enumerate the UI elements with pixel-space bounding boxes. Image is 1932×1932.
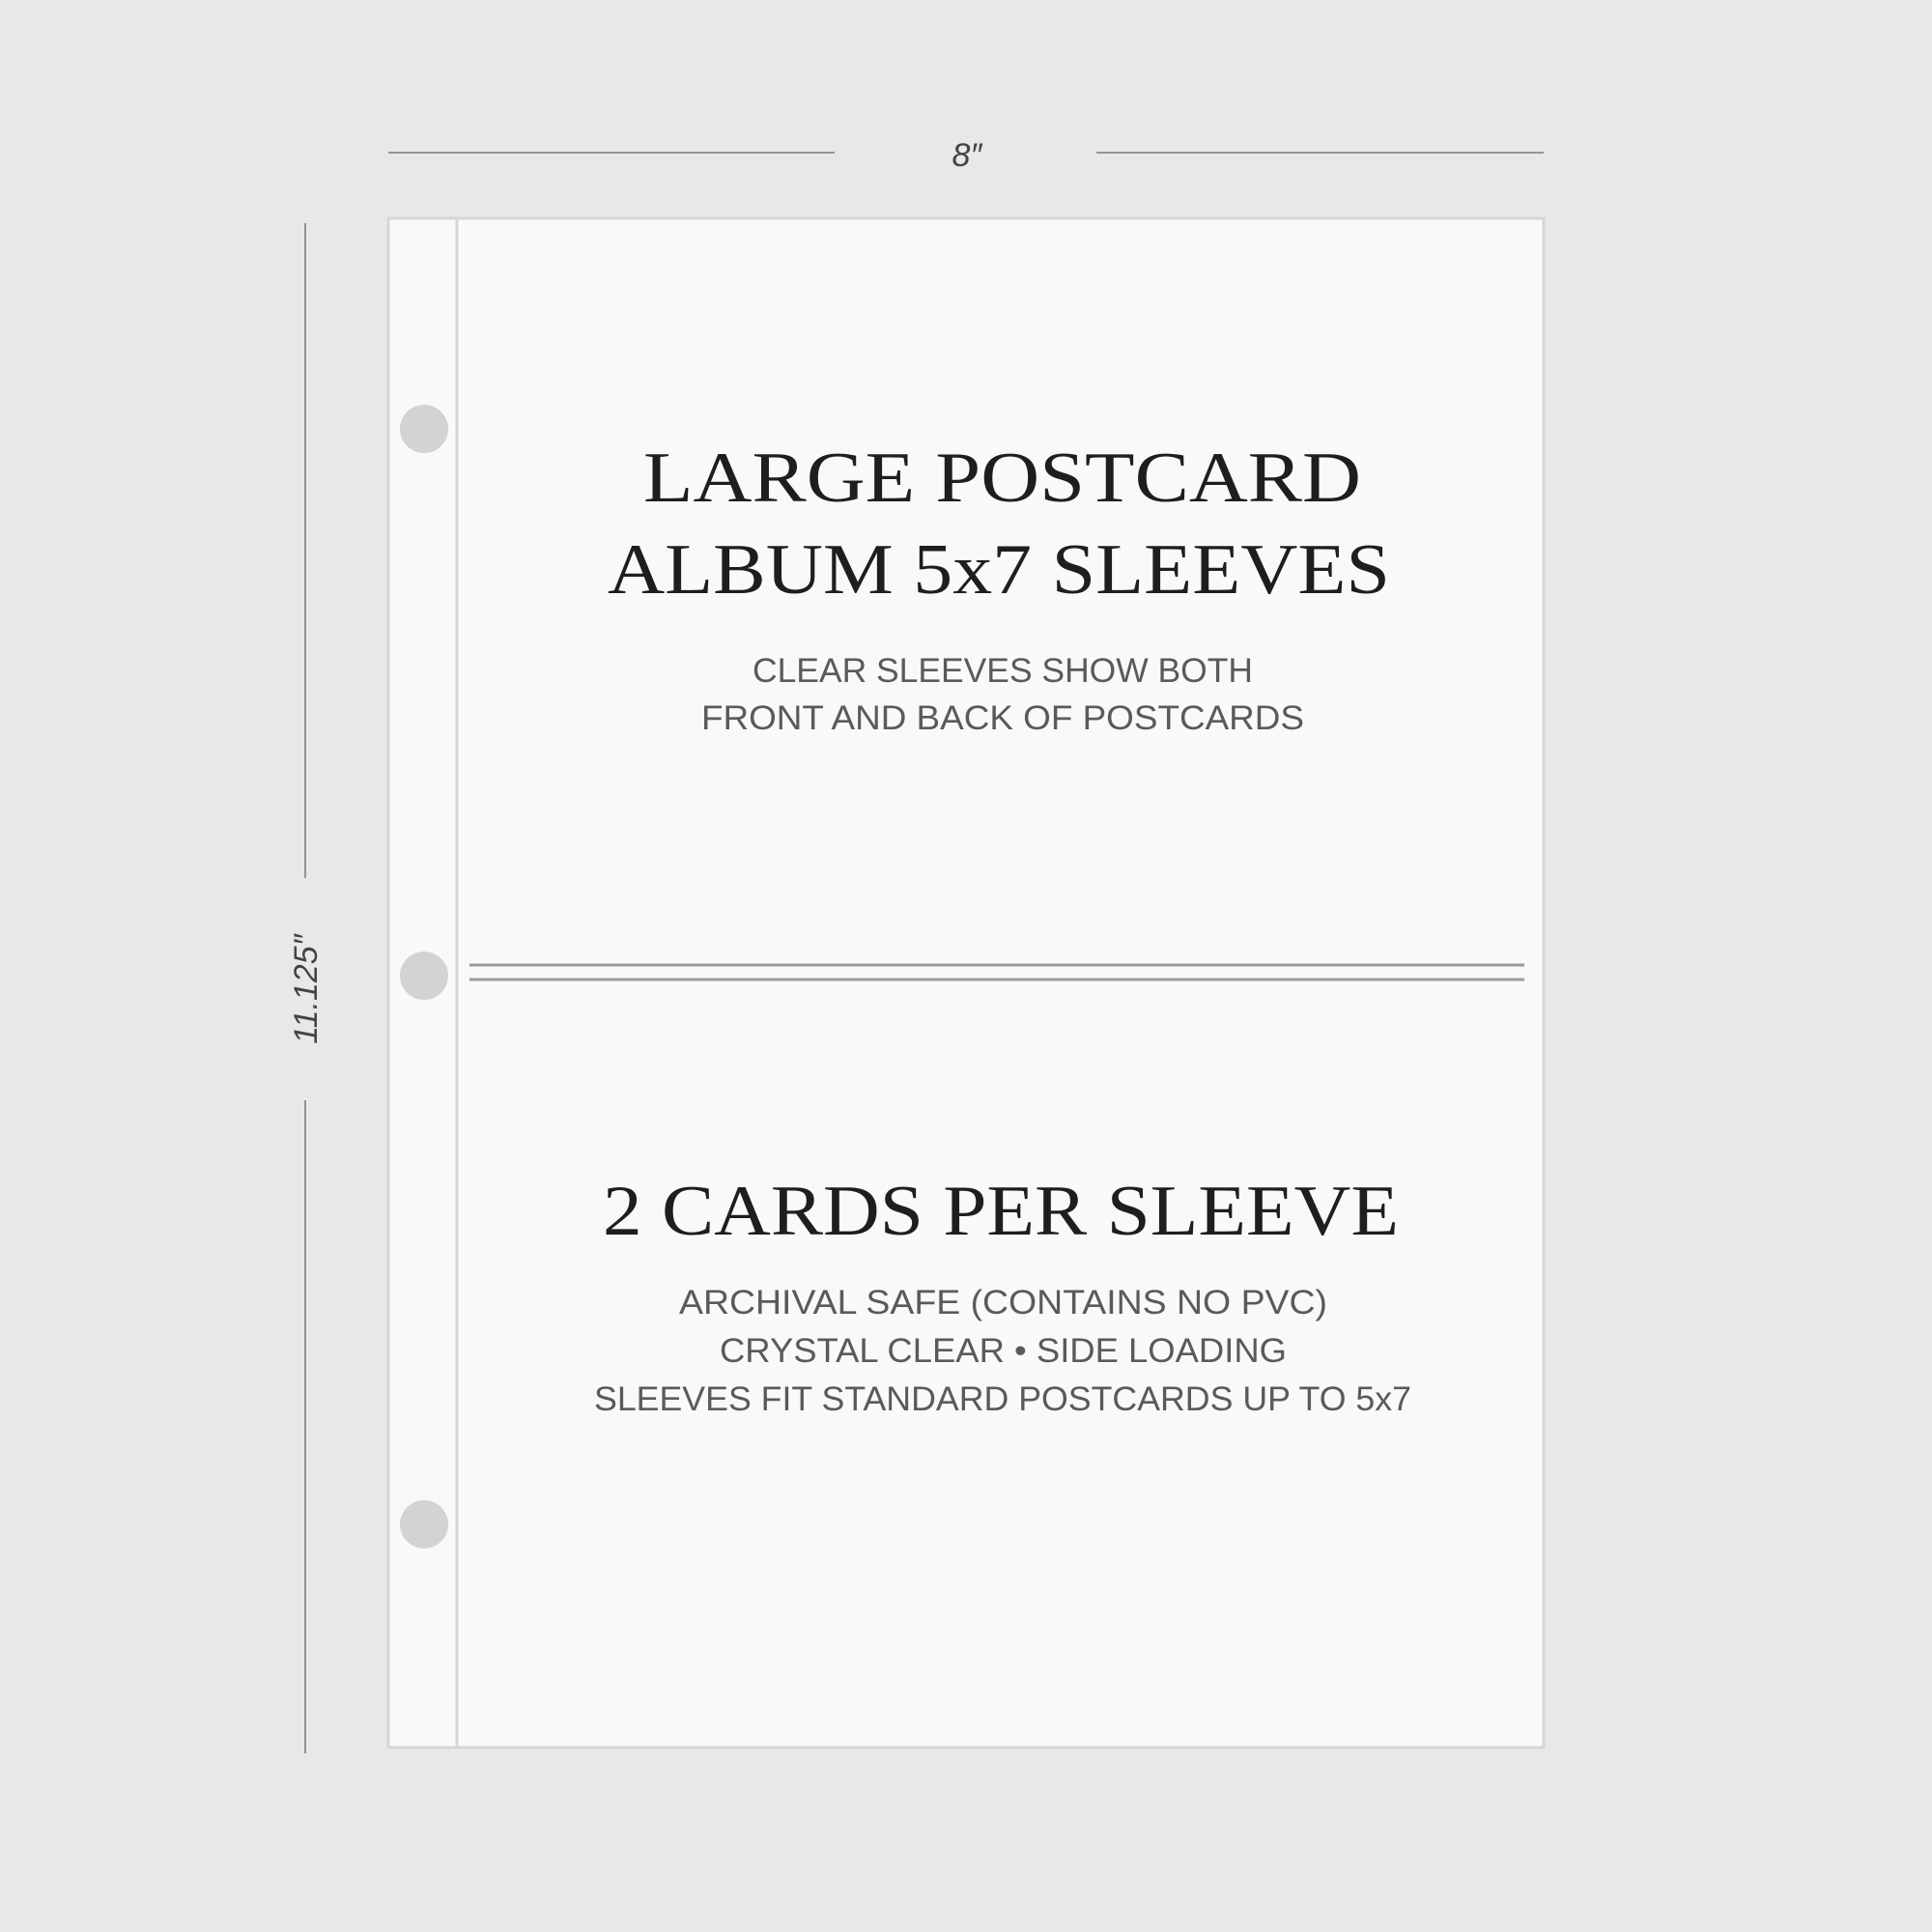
subtitle: FRONT AND BACK OF POSTCARDS [701, 699, 1304, 737]
features text block: SLEEVES FIT STANDARD POSTCARDS UP TO 5x7 [594, 1380, 1411, 1418]
icon: punch holes [400, 405, 448, 1548]
sleeve sheet [388, 218, 1544, 1747]
features text block: CRYSTAL CLEAR • SIDE LOADING [720, 1332, 1287, 1370]
subtitle [701, 652, 1304, 737]
features text block [594, 1284, 1411, 1418]
title [608, 439, 1390, 610]
binding strip [456, 218, 458, 1747]
title: LARGE POSTCARD [643, 439, 1361, 518]
heading: cards per sleeve: 2 CARDS PER SLEEVE [603, 1172, 1399, 1251]
subtitle: CLEAR SLEEVES SHOW BOTH [753, 652, 1253, 690]
height dimension: 11.125 inch: 11.125″ [288, 933, 325, 1044]
divider: sleeve seam [469, 965, 1524, 980]
width dimension: 8 inch: 8″ [952, 137, 982, 174]
title: ALBUM 5x7 SLEEVES [608, 530, 1390, 610]
features text block: ARCHIVAL SAFE (CONTAINS NO PVC) [679, 1284, 1327, 1321]
